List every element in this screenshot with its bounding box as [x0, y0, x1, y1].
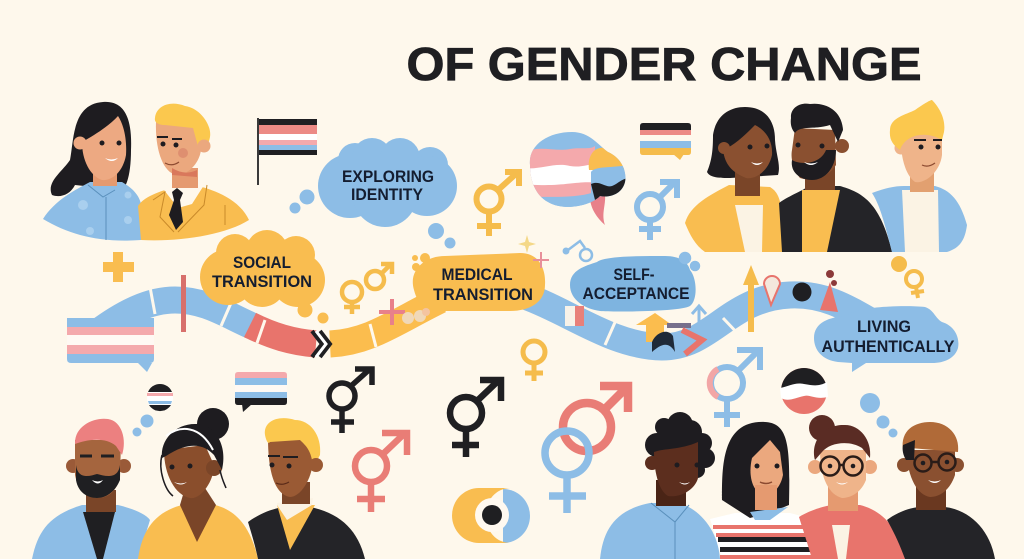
thought dots: exploring identity [290, 190, 456, 248]
person: woman with long black hair and striped top [710, 422, 812, 559]
ribbon marker: arrows and shapes [636, 306, 706, 354]
label bubble: living authentically [814, 306, 958, 372]
person: blond man with blue jacket [872, 100, 967, 252]
gender symbol: salmon [355, 433, 407, 512]
person: blond man with black suit [248, 418, 365, 559]
label cloud: exploring identity [318, 138, 457, 227]
person: blond man with yellow jacket and tie [138, 104, 249, 240]
brain flag icon [530, 132, 626, 225]
gender symbol: yellow [476, 172, 519, 236]
label cloud: medical transition [413, 253, 545, 311]
circular flag badge left [147, 384, 173, 411]
thought dots bottom left [132, 414, 154, 436]
ribbon marker: salmon cone with dots [820, 270, 838, 312]
gender symbol: yellow double [342, 264, 392, 314]
label cloud: social transition [200, 230, 325, 307]
gender symbol: black center [450, 380, 501, 457]
speech flag left [67, 318, 154, 372]
label cloud: exploring identity: EXPLORING [342, 167, 434, 186]
plus sign salmon [379, 299, 405, 325]
person: man with glasses and black sweater [887, 422, 995, 559]
label cloud: exploring identity: IDENTITY [351, 185, 424, 204]
label bubble: living authentically: LIVING [857, 318, 911, 336]
title: OF GENDER CHANGE [406, 38, 922, 90]
label cloud: social transition: SOCIAL [233, 254, 291, 272]
flag on pole [257, 118, 317, 185]
gender symbol: blue and salmon [710, 350, 760, 427]
person: man with curly hair and blue shirt [600, 412, 720, 559]
eye icon [452, 488, 530, 543]
label cloud: medical transition: TRANSITION [433, 286, 533, 304]
gender symbol: large salmon male [563, 386, 628, 451]
person: man with pink hair and blue jacket [32, 419, 150, 559]
sparkles [518, 235, 549, 268]
circular wave badge right [780, 368, 828, 414]
ribbon marker: white and salmon square [565, 306, 584, 326]
label cloud: social transition: TRANSITION [212, 273, 312, 291]
person: woman with glasses, bun and salmon jacket [799, 415, 905, 559]
person: bearded man with black jacket [779, 104, 892, 252]
person: woman with hair bun and yellow top [138, 408, 258, 559]
plus sign yellow [103, 252, 134, 282]
small star accents [402, 308, 430, 324]
gender symbol: large blue female [545, 431, 589, 513]
ribbon marker: location pin [764, 276, 780, 305]
label cloud: self-acceptance: SELF- [614, 266, 654, 284]
label cloud: self-acceptance [570, 256, 696, 311]
gender symbol: black left [329, 369, 372, 433]
decorative icons near self-acceptance [564, 241, 699, 270]
speech flag top right [640, 123, 691, 160]
thought dots: social transition [298, 302, 328, 324]
gender symbol: blue [637, 182, 677, 240]
ribbon marker: red bar [181, 275, 186, 332]
ribbon marker: yellow up arrow [743, 265, 759, 332]
label cloud: medical transition: MEDICAL [442, 266, 512, 284]
person: woman with yellow jacket, top right [685, 107, 783, 252]
bubbles: medical transition [412, 253, 430, 271]
label bubble: living authentically: AUTHENTICALLY [822, 338, 954, 356]
gender symbol: yellow right [891, 256, 924, 298]
ribbon marker: black dot [792, 282, 812, 302]
speech flag mid bottom [235, 372, 287, 412]
person: woman with black hair, blue shirt [43, 102, 142, 241]
label cloud: self-acceptance: ACCEPTANCE [582, 285, 690, 303]
thought dots right [860, 393, 898, 438]
journey ribbon path [98, 287, 905, 357]
gender symbol: yellow small female [523, 341, 545, 381]
